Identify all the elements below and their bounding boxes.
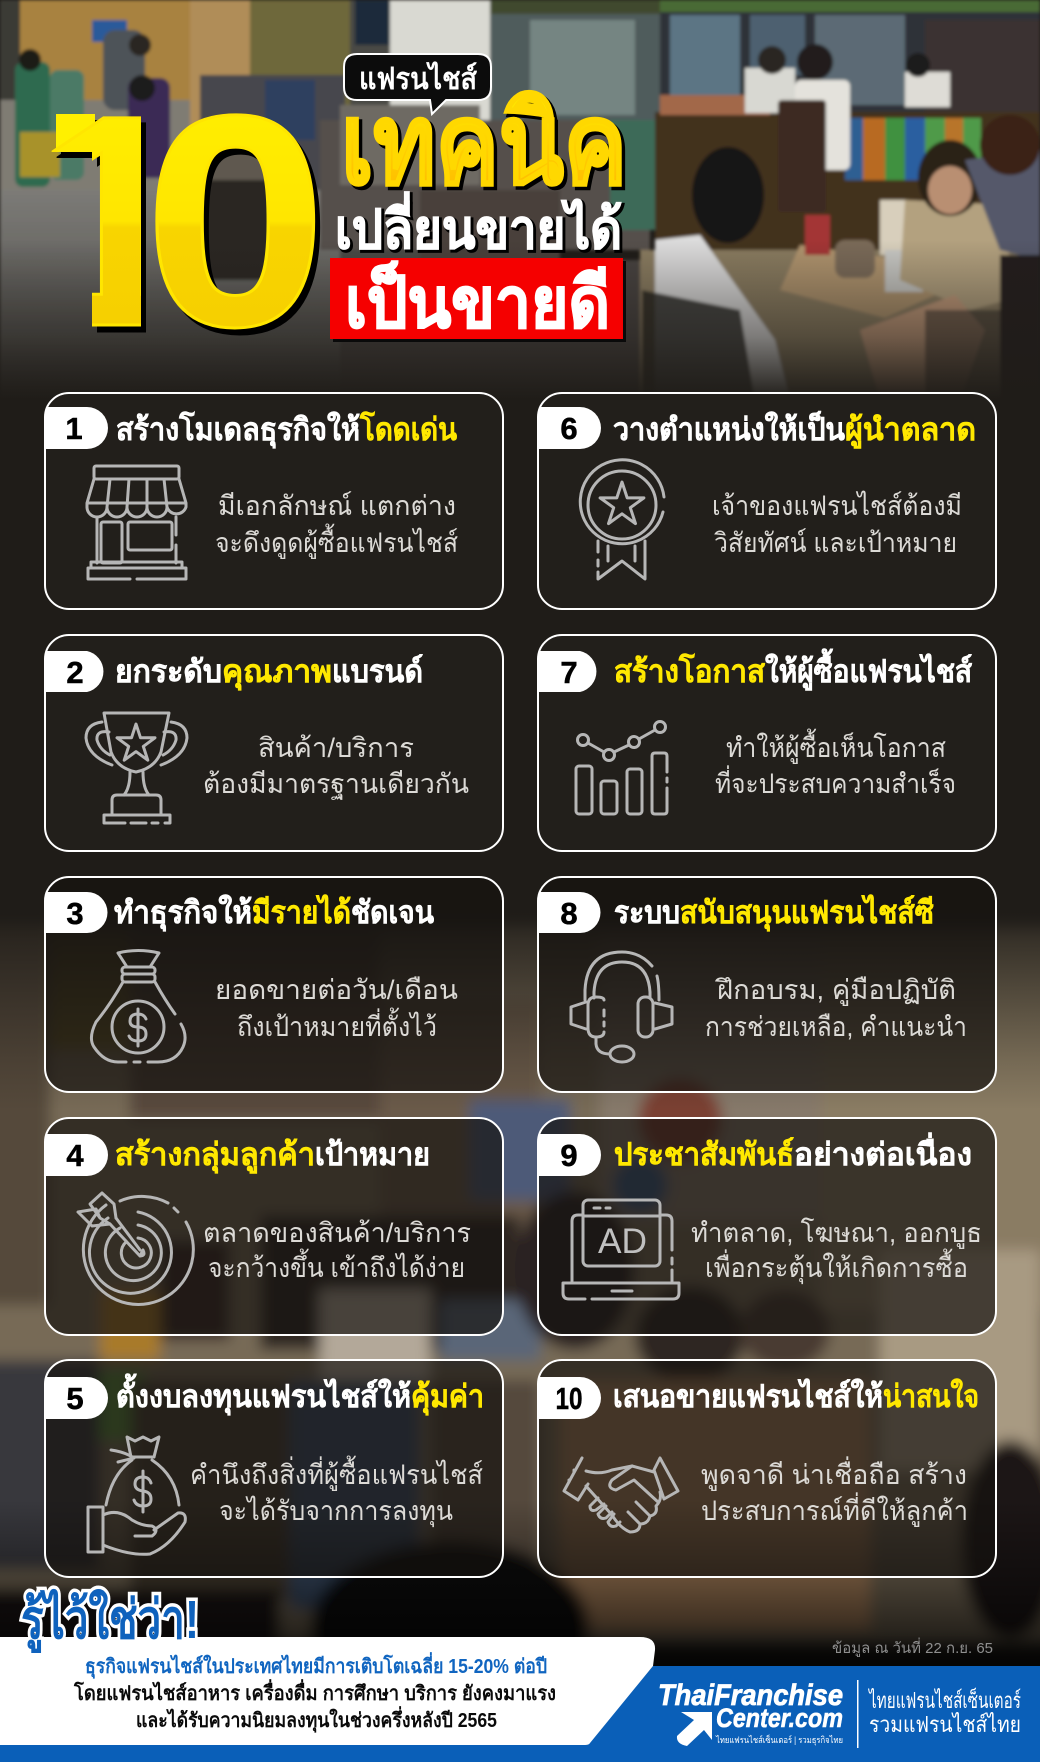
heading 2 (115, 654, 423, 691)
description 7 (715, 728, 956, 799)
description 4: จะกว้างขึ้น เข้าถึงได้ง่าย (208, 1248, 465, 1283)
heading: did you know: รู้ไว้ใช่ว่า! (21, 1588, 199, 1653)
description 7: ที่จะประสบความสำเร็จ (715, 765, 956, 799)
description 10: พูดจาดี น่าเชื่อถือ สร้าง (701, 1456, 967, 1491)
number tab 6: 6 (560, 411, 578, 446)
heading 9: ประชาสัมพันธ์ (614, 1137, 794, 1172)
heading 4: สร้างกลุ่มลูกค้า (115, 1137, 315, 1174)
icon: laptop with AD (563, 1200, 679, 1299)
source note: ข้อมูล ณ วันที่ 22 ก.ย. 65 (832, 1637, 993, 1657)
description 9: ทำตลาด, โฆษณา, ออกบูธ (691, 1218, 982, 1249)
big number 10: 1 (38, 59, 201, 395)
heading 4: เป้าหมาย (315, 1137, 430, 1172)
number tab 8 (539, 892, 600, 933)
heading 3 (114, 894, 434, 932)
heading 5: คุ้มค่า (411, 1379, 484, 1416)
heading 7: สร้างโอกาส (614, 653, 765, 689)
heading 8: ระบบ (614, 895, 680, 930)
heading 8: สนับสนุนแฟรนไชส์ซี (680, 894, 934, 932)
number tab 3: 3 (66, 896, 84, 931)
heading: turn selling: เปลี่ยนขายได้ (335, 191, 622, 260)
heading 9: อย่างต่อเนื่อง (794, 1132, 972, 1172)
red banner: sell well: เป็นขายดี (345, 260, 610, 342)
panel: card 4 (45, 1118, 503, 1335)
logo: ThaiFranchise Center: Center.com (716, 1703, 843, 1733)
description 10 (701, 1456, 968, 1527)
number tab 7 (539, 651, 596, 692)
fact text (73, 1651, 556, 1733)
description 1: มีเอกลักษณ์ แตกต่าง (218, 490, 456, 521)
heading 6: วางตำแหน่งให้เป็น (613, 410, 845, 447)
heading 3: ชัดเจน (351, 895, 434, 930)
number tab 2 (46, 651, 103, 692)
speech bubble: franchise (344, 54, 491, 114)
fact text: และได้รับความนิยมลงทุนในช่วงครึ่งหลังปี 2565 (136, 1705, 497, 1733)
big number 10: 0 (144, 53, 327, 389)
panel: card 8 (538, 877, 996, 1092)
number tab 7: 7 (560, 655, 578, 690)
description 4 (203, 1218, 471, 1283)
panel: card 3 (45, 877, 503, 1092)
heading 7: ให้ผู้ซื้อแฟรนไชส์ (765, 648, 972, 691)
icon: growth bar chart (576, 722, 667, 814)
number tab 4: 4 (66, 1138, 84, 1173)
description 5: คำนึงถึงสิ่งที่ผู้ซื้อแฟรนไชส์ (190, 1455, 483, 1491)
description 1: จะดึงดูดผู้ซื้อแฟรนไชส์ (215, 523, 458, 559)
description 6: วิสัยทัศน์ และเป้าหมาย (714, 527, 957, 558)
icon: money bag (91, 950, 185, 1062)
heading: techniques: เทคนิค (341, 82, 627, 207)
number tab 5 (46, 1377, 108, 1419)
panel: card 1 (45, 393, 503, 609)
description 3: ถึงเป้าหมายที่ตั้งไว้ (237, 1007, 437, 1042)
background fade: top photo to dark (0, 240, 1040, 400)
big number 10: 0 (149, 59, 332, 395)
heading 9 (614, 1132, 972, 1172)
logo: ThaiFranchise Center: ThaiFranchise (658, 1679, 843, 1712)
panel: card 6 (538, 393, 996, 609)
number tab 9 (539, 1134, 601, 1176)
divider (857, 1680, 858, 1748)
number tab 1: 1 (65, 411, 83, 446)
description 6: เจ้าของแฟรนไชส์ต้องมี (712, 490, 962, 521)
description 5 (190, 1455, 483, 1528)
panel: did you know (0, 1588, 655, 1745)
heading 4 (115, 1137, 430, 1174)
heading 3: มีรายได้ (252, 894, 351, 930)
description 2: ต้องมีมาตรฐานเดียวกัน (203, 769, 469, 800)
icon: laptop with AD: AD (598, 1222, 647, 1261)
number tab 1 (46, 407, 108, 449)
description 3: ยอดขายต่อวัน/เดือน (215, 975, 458, 1005)
tagline: รวมแฟรนไชส์ไทย (869, 1712, 1021, 1737)
heading 6 (613, 410, 976, 449)
icon: handshake (564, 1458, 678, 1532)
description 8: การช่วยเหลือ, คำแนะนำ (705, 1012, 967, 1042)
heading 5: ตั้งงบลงทุนแฟรนไชส์ให้ (116, 1373, 411, 1416)
heading 10: น่าสนใจ (883, 1378, 979, 1414)
heading 2: คุณภาพ (222, 654, 332, 691)
fact text: ธุรกิจแฟรนไชส์ในประเทศไทยมีการเติบโตเฉลี่ย 15-20% ต่อปี (85, 1651, 547, 1679)
icon: logo arrow (677, 1712, 712, 1746)
heading 6: ผู้นำตลาด (845, 412, 976, 449)
footer: blue band (0, 1666, 1040, 1762)
icon: target and arrow (78, 1193, 193, 1304)
number tab 8: 8 (560, 896, 578, 931)
heading 10: เสนอขายแฟรนไชส์ให้ (613, 1378, 883, 1414)
panel: card 10 (538, 1360, 996, 1577)
heading 8 (614, 894, 934, 932)
icon: trophy (86, 713, 187, 823)
tagline (868, 1686, 1021, 1737)
description 10: ประสบการณ์ที่ดีให้ลูกค้า (701, 1492, 968, 1527)
panel: card 2 (45, 635, 503, 851)
description 8: ฝึกอบรม, คู่มือปฏิบัติ (715, 975, 956, 1006)
number tab 4 (46, 1134, 108, 1176)
number tab 9: 9 (560, 1138, 578, 1173)
icon: storefront (87, 466, 186, 579)
title (52, 53, 626, 342)
panel: card 9 (538, 1118, 996, 1335)
icon: headset (571, 952, 672, 1062)
background: band between photos (0, 400, 1040, 860)
description 7: ทำให้ผู้ซื้อเห็นโอกาส (726, 728, 946, 764)
number tab 10: 10 (556, 1381, 582, 1416)
heading 3: ทำธุรกิจให้ (114, 894, 252, 932)
description 8 (705, 975, 967, 1042)
heading: techniques: เทคนิค (344, 85, 630, 210)
heading 7 (614, 648, 972, 691)
description 2 (203, 733, 469, 800)
big number 10 (52, 113, 320, 336)
heading 1: โดดเด่น (359, 411, 457, 447)
description 5: จะได้รับจากการลงทุน (219, 1496, 453, 1528)
icon: money bag in hand (88, 1437, 185, 1554)
number tab 10 (539, 1377, 601, 1419)
background photo: food court (0, 0, 1040, 400)
big number 10: 1 (33, 53, 196, 389)
heading: turn selling: เปลี่ยนขายได้ (337, 193, 624, 262)
number tab 3 (46, 892, 107, 933)
logo: ThaiFranchise Center: ไทยแฟรนไชส์เซ็นเตอร์ | รวมธุรกิจไทย (715, 1733, 843, 1746)
description 9 (691, 1218, 982, 1285)
description 6 (712, 490, 962, 558)
heading 2: ยกระดับ (115, 654, 222, 689)
heading 2: แบรนด์ (332, 654, 423, 689)
icon: medal with star (580, 460, 664, 579)
number tab 2: 2 (66, 655, 84, 690)
panel: card 5 (45, 1360, 503, 1577)
description 2: สินค้า/บริการ (258, 733, 414, 763)
number tab 5: 5 (66, 1381, 84, 1416)
description 4: ตลาดของสินค้า/บริการ (203, 1218, 471, 1248)
background fade: crowd photo top (0, 860, 1040, 1110)
description 9: เพื่อกระตุ้นให้เกิดการซื้อ (705, 1248, 968, 1285)
number tab 6 (539, 407, 601, 449)
description 1 (215, 490, 458, 559)
background fade: crowd photo bottom (0, 1500, 1040, 1670)
fact text: โดยแฟรนไชส์อาหาร เครื่องดื่ม การศึกษา บริการ ยังคงมาแรง (73, 1678, 556, 1705)
panel: card 7 (538, 635, 996, 851)
background photo: market crowd (0, 925, 1040, 1720)
heading 1: สร้างโมเดลธุรกิจให้ (116, 411, 360, 449)
description 3 (215, 975, 458, 1042)
logo: ThaiFranchise Center (658, 1679, 843, 1746)
speech bubble: franchise: แฟรนไชส์ (359, 61, 478, 96)
